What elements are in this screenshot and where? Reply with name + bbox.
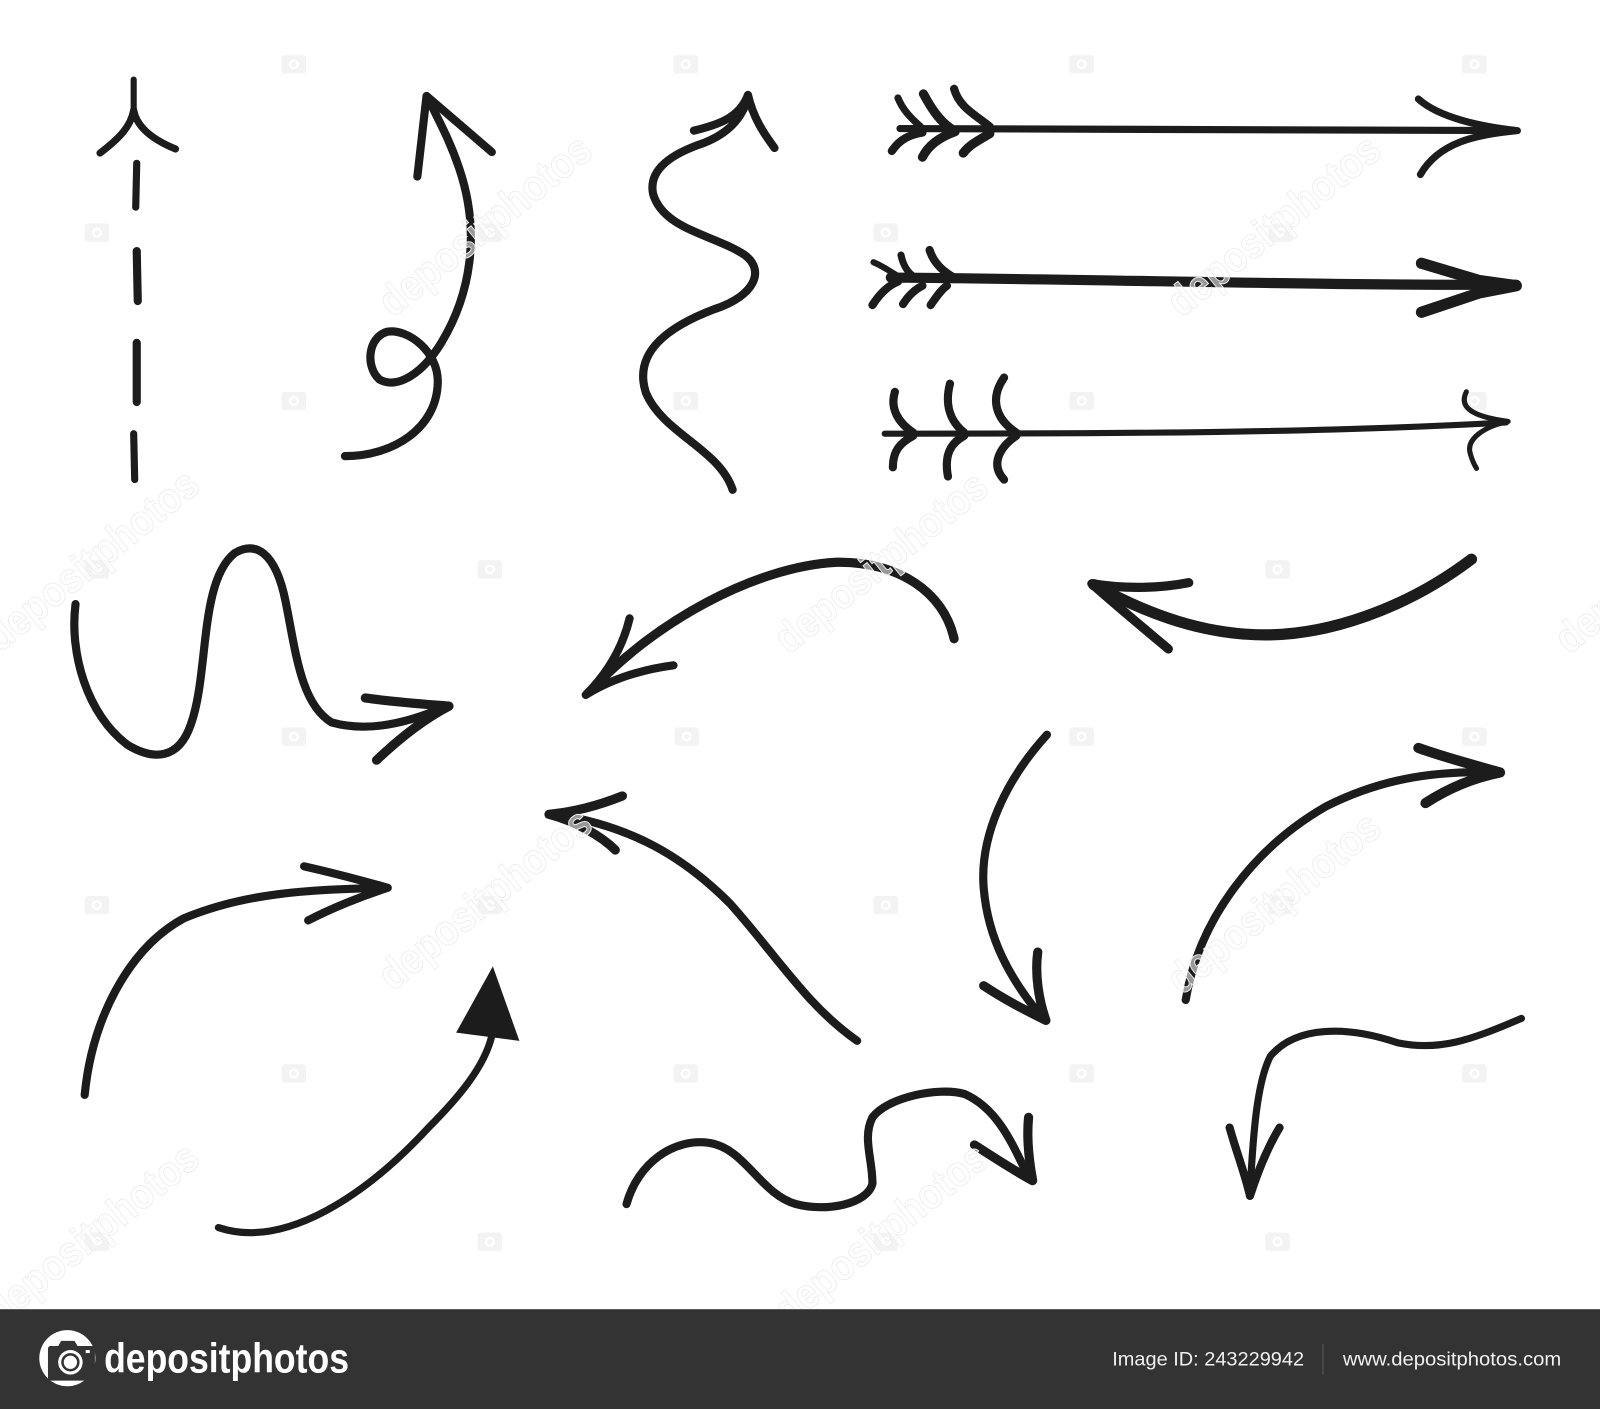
watermark: diagonal wordmarks: depositphotos <box>765 462 997 663</box>
arrow: arc to upper right <box>1186 748 1500 1000</box>
watermark: diagonal wordmarks: depositphotos <box>1158 803 1390 1004</box>
arrow: dashed upward <box>100 80 176 480</box>
arrow: bottom wavy to right <box>627 1092 1033 1207</box>
arrow: wave then downward <box>1230 1018 1521 1196</box>
arrow: long fletched top <box>892 89 1517 174</box>
footer bar <box>0 1309 1600 1409</box>
arrow: wavy upward <box>643 95 774 490</box>
arrow: long fletched thick middle <box>872 250 1516 312</box>
watermark: diagonal wordmarks: depositphotos <box>369 799 601 1000</box>
website url: www.depositphotos.com <box>1342 1348 1561 1370</box>
arrow: bump curve to right <box>74 548 449 760</box>
arrow: arc to lower left <box>586 562 954 695</box>
arrow: arc to right lower left <box>85 866 388 1095</box>
arrow: curve downward <box>983 735 1047 1020</box>
watermark: diagonal wordmarks: depositphotos <box>1158 125 1390 326</box>
watermark: diagonal wordmarks: depositphotos <box>369 125 601 326</box>
watermark: diagonal wordmarks: depositphotos <box>765 1133 997 1334</box>
arrow: solid triangle head <box>218 966 519 1233</box>
arrow: long fletched thin bottom <box>885 378 1508 480</box>
image id: Image ID: 243229942 <box>1112 1348 1304 1370</box>
logo wordmark: depositphotos <box>104 1334 349 1381</box>
watermark: camera icons <box>85 55 1487 1251</box>
arrow: upward with loop <box>345 96 492 456</box>
arrow: thick swoosh to left <box>1092 559 1471 649</box>
icon: camera logo <box>39 1330 95 1386</box>
arrow: S-curve to upper left <box>549 796 857 1041</box>
